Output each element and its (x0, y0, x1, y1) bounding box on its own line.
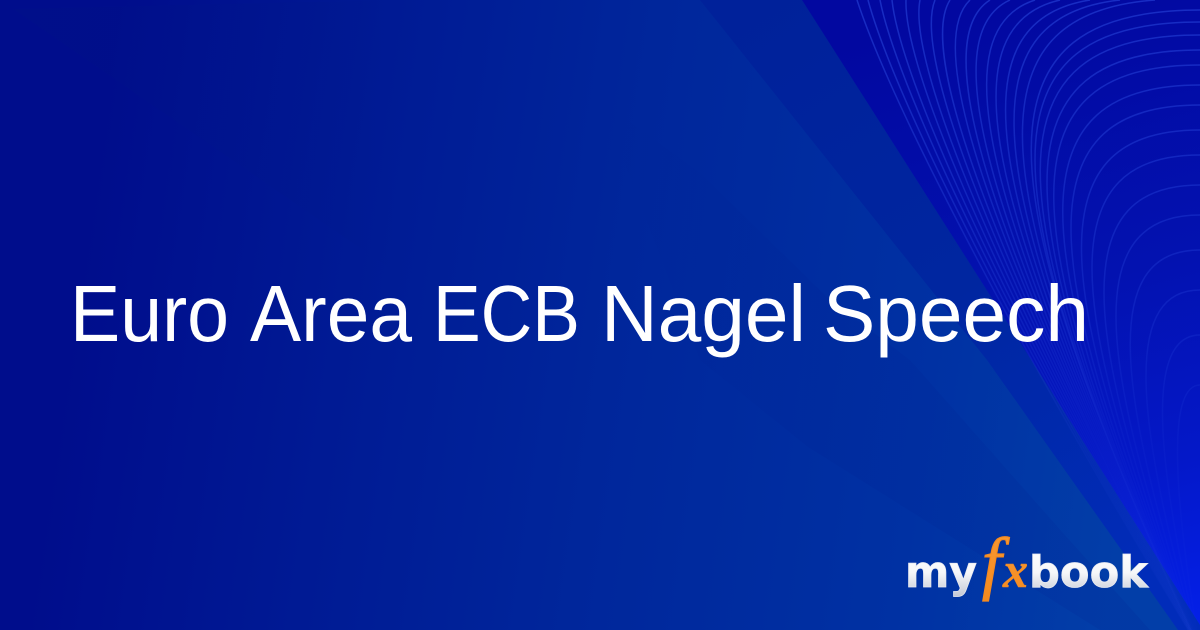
logo: myfxbook (905, 525, 1150, 602)
logo: myfxbook: my (905, 547, 977, 598)
diagonal band (700, 0, 1200, 630)
title: Speech (823, 269, 1089, 358)
title: Area (250, 269, 412, 358)
title: Euro (70, 269, 229, 358)
title: Nagel (601, 269, 806, 358)
logo: myfxbook: x (1002, 542, 1028, 598)
logo: myfxbook: f (982, 525, 1010, 602)
logo: myfxbook: book (1029, 547, 1150, 598)
dark corner panel with curved lines (802, 0, 1200, 630)
title: ECB (433, 269, 580, 358)
title (70, 269, 1089, 358)
